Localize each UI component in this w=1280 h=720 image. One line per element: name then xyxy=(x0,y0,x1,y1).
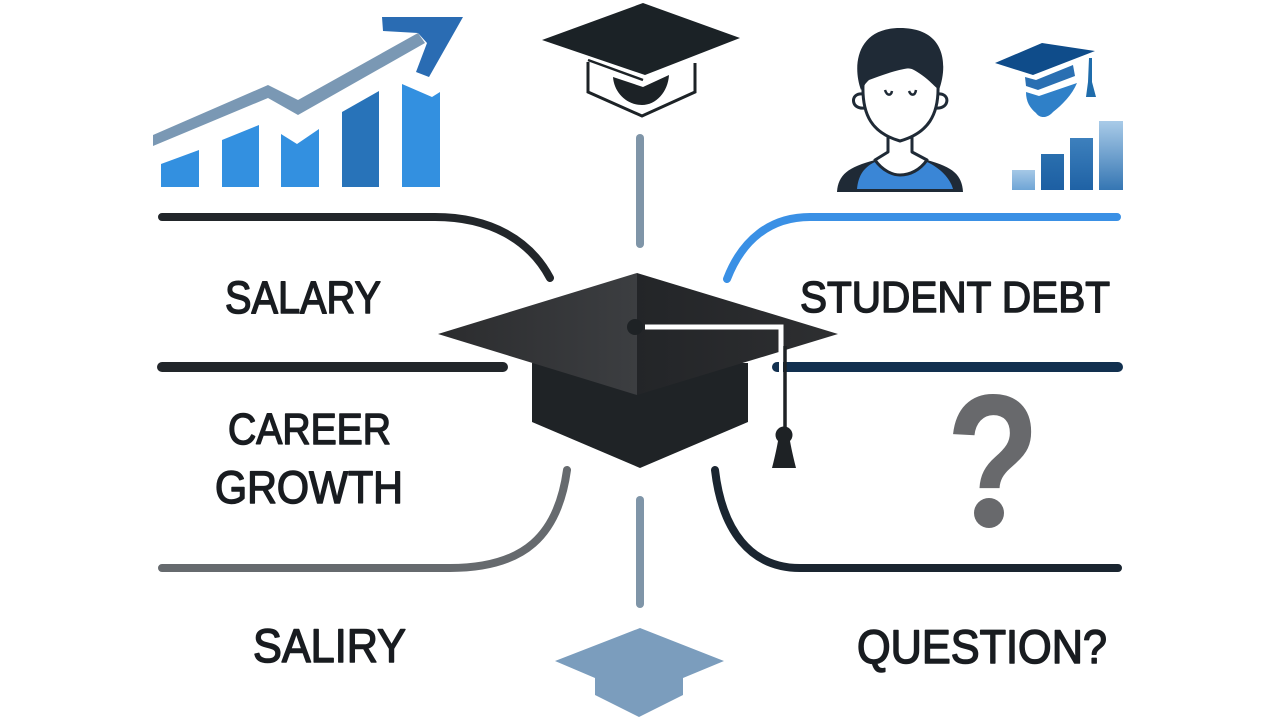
hair xyxy=(857,28,943,90)
bar 2 xyxy=(222,125,259,187)
arrow head xyxy=(382,17,463,77)
cap inner semicircle xyxy=(613,75,669,105)
bar 3 xyxy=(281,129,319,187)
small bar 2 xyxy=(1041,154,1064,190)
bar 5 xyxy=(402,84,440,187)
connector: middle right xyxy=(777,362,1118,372)
face xyxy=(863,66,938,141)
label: salary: SALARY xyxy=(225,272,381,323)
icon: small bar chart xyxy=(1012,121,1123,190)
connector: bottom vertical xyxy=(636,500,644,604)
small bar 4 xyxy=(1099,121,1123,190)
shirt shoulders xyxy=(837,160,963,192)
tassel cord xyxy=(783,346,787,432)
connector: top right curve xyxy=(727,217,1117,279)
small bar 3 xyxy=(1070,138,1093,190)
white tassel cord highlight xyxy=(645,327,781,352)
shirt blue front xyxy=(857,162,953,189)
connector: top vertical xyxy=(636,138,644,244)
connector: middle left xyxy=(162,362,503,372)
label: career: CAREER xyxy=(228,405,391,454)
tassel button xyxy=(627,319,643,335)
icon: small graduation cap top centre xyxy=(542,3,740,116)
icon: student portrait xyxy=(837,28,963,192)
mortarboard xyxy=(542,3,740,75)
icon: large question mark xyxy=(946,354,1040,569)
bar 1 xyxy=(161,150,199,187)
mortarboard left xyxy=(438,273,637,395)
eyes xyxy=(885,90,916,95)
ears xyxy=(853,94,947,108)
cap top xyxy=(995,43,1095,75)
tassel xyxy=(1086,58,1096,97)
round dot xyxy=(974,498,1004,528)
cap band upper xyxy=(1025,65,1075,90)
cap band line xyxy=(588,60,643,80)
mortarboard right xyxy=(637,273,838,395)
trend line xyxy=(153,33,425,146)
white cord edge xyxy=(779,350,783,430)
tassel body xyxy=(772,441,796,468)
tassel knob xyxy=(776,426,792,444)
connector: bottom right curve xyxy=(715,470,1118,568)
cap base xyxy=(532,363,748,468)
small bar 1 xyxy=(1012,170,1035,190)
label: question: QUESTION? xyxy=(857,620,1107,673)
cap band lower xyxy=(1026,83,1077,117)
mask over square dot xyxy=(965,491,1015,531)
icon: central graduation cap xyxy=(438,273,838,468)
icon: lower blue graduation cap xyxy=(555,628,724,717)
label: student debt: STUDENT DEBT xyxy=(800,273,1110,322)
connector: bottom left curve xyxy=(162,470,567,568)
cap box outline xyxy=(588,62,695,116)
question mark glyph: ? xyxy=(946,354,1040,569)
icon: small blue graduation cap xyxy=(995,43,1096,117)
neck and collar xyxy=(875,136,927,175)
label: saliry: SALIRY xyxy=(253,619,406,672)
bar 4 xyxy=(342,91,379,187)
label: growth: GROWTH xyxy=(215,462,403,513)
chart icon: rising salary bars with arrow xyxy=(153,17,463,187)
connector: top left curve xyxy=(162,217,550,278)
